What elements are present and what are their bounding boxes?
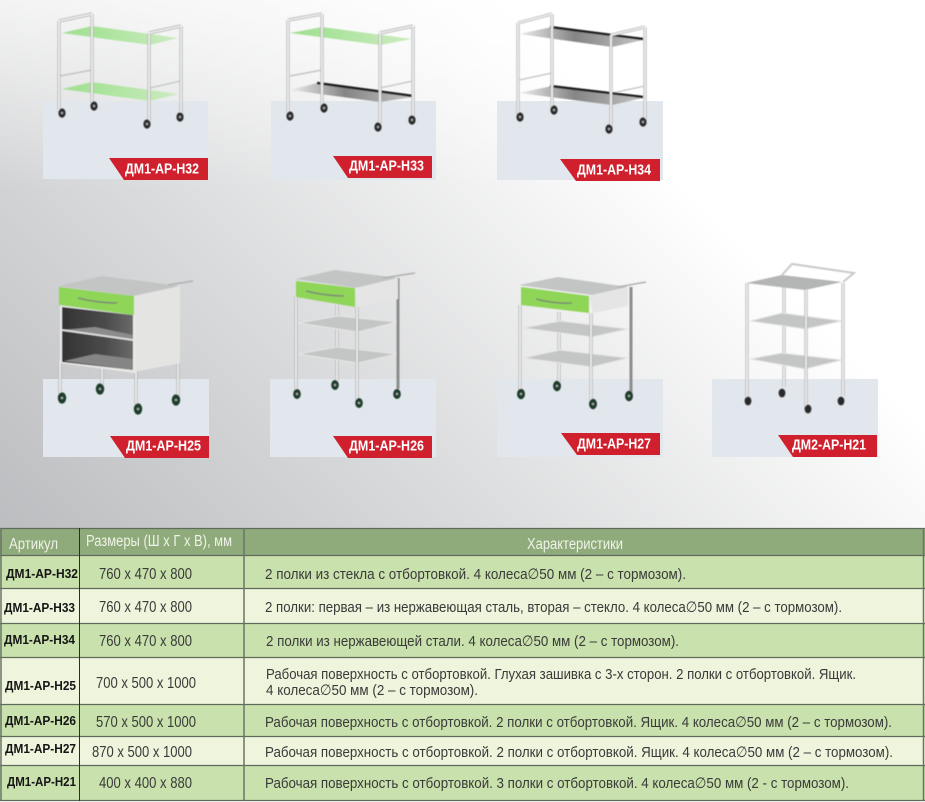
row: Н34	[0, 624, 925, 657]
floor panel	[270, 379, 436, 457]
product: ДМ1-АР-Н32	[43, 14, 208, 180]
row: Н33	[0, 589, 925, 623]
label tag	[778, 435, 877, 457]
product: ДМ1-АР-Н25	[43, 276, 209, 458]
floor panel	[43, 379, 209, 457]
label tag: ДМ1-АР-Н33	[349, 158, 424, 174]
label tag	[109, 158, 208, 180]
row: Н21: ДМ1-АР-Н21	[7, 774, 76, 789]
product: ДМ1-АР-Н27	[497, 277, 663, 457]
label tag	[561, 433, 660, 455]
label tag	[560, 159, 660, 181]
row: Н33: 2 полки: первая – из нержавеющая сталь, вторая – стекло. 4 колеса∅50 мм (2 – с тормозом).	[265, 599, 842, 616]
label tag: ДМ1-АР-Н25	[126, 438, 201, 454]
row: Н25: 4 колеса∅50 мм (2 – с тормозом).	[266, 682, 478, 699]
label tag: ДМ1-АР-Н34	[577, 162, 652, 178]
row: Н27: 870 х 500 х 1000	[92, 744, 192, 761]
row: Н34: 760 х 470 х 800	[99, 633, 192, 650]
floor panel	[712, 379, 878, 457]
row: Н25: 700 х 500 х 1000	[96, 675, 196, 692]
row: Н32: ДМ1-АР-Н32	[6, 566, 78, 581]
row: Н21	[0, 766, 925, 800]
cart: two steel shelves	[516, 14, 647, 134]
table header: Артикул	[9, 536, 58, 553]
product: ДМ2-АР-Н21	[712, 264, 878, 457]
cart: glass and steel shelves	[286, 14, 416, 132]
cart: drawer and two shelves	[293, 270, 415, 408]
label tag: ДМ2-АР-Н21	[792, 436, 866, 454]
row: Н21: Рабочая поверхность с отбортовкой. 3 полки с отбортовкой. 4 колеса∅50 мм (2 - с тормозом).	[265, 775, 849, 792]
row: Н26: ДМ1-АР-Н26	[5, 713, 76, 728]
row: Н25	[0, 658, 925, 704]
specification table	[0, 528, 925, 801]
floor panel	[497, 379, 663, 457]
label tag: ДМ1-АР-Н32	[125, 160, 199, 178]
row: Н34: ДМ1-АР-Н34	[4, 632, 76, 647]
table header	[0, 528, 925, 556]
floor panel	[497, 101, 663, 180]
label tag	[333, 156, 432, 178]
floor panel	[43, 101, 208, 179]
row: Н27	[0, 737, 925, 765]
cart: two glass shelves	[58, 14, 184, 129]
label tag: ДМ1-АР-Н27	[577, 436, 651, 452]
row: Н26	[0, 705, 925, 736]
label tag	[110, 436, 209, 458]
row: Н32: 2 полки из стекла с отбортовкой. 4 колеса∅50 мм (2 – с тормозом).	[265, 566, 686, 583]
row: Н25: ДМ1-АР-Н25	[5, 678, 76, 693]
background gradient	[0, 0, 925, 530]
row: Н27: ДМ1-АР-Н27	[5, 741, 76, 756]
row: Н26: 570 х 500 х 1000	[96, 714, 196, 731]
row: Н32: 760 х 470 х 800	[99, 566, 192, 583]
label tag: ДМ1-АР-Н26	[349, 438, 424, 454]
product: ДМ1-АР-Н33	[271, 14, 436, 180]
table header: Характеристики	[527, 536, 623, 553]
row: Н33: 760 х 470 х 800	[99, 599, 192, 616]
floor panel	[271, 101, 436, 180]
row: Н33: ДМ1-АР-Н33	[4, 600, 75, 615]
table header: Размеры (Ш х Г х В), мм	[86, 533, 232, 550]
row: Н25: Рабочая поверхность с отбортовкой. Глухая зашивка с 3-х сторон. 2 полки с отбортовкой. Ящик.	[266, 666, 856, 683]
cart: wide, drawer and two shelves	[517, 277, 646, 409]
label tag	[333, 436, 432, 458]
cart: closed cabinet with drawer	[58, 276, 193, 415]
row: Н34: 2 полки из нержавеющей стали. 4 колеса∅50 мм (2 – с тормозом).	[266, 633, 679, 650]
row: Н21: 400 х 400 х 880	[99, 775, 192, 792]
product: ДМ1-АР-Н26	[270, 270, 436, 458]
product: ДМ1-АР-Н34	[497, 14, 663, 181]
cart: three shelves with handle	[745, 264, 854, 413]
row: Н32	[0, 556, 925, 588]
